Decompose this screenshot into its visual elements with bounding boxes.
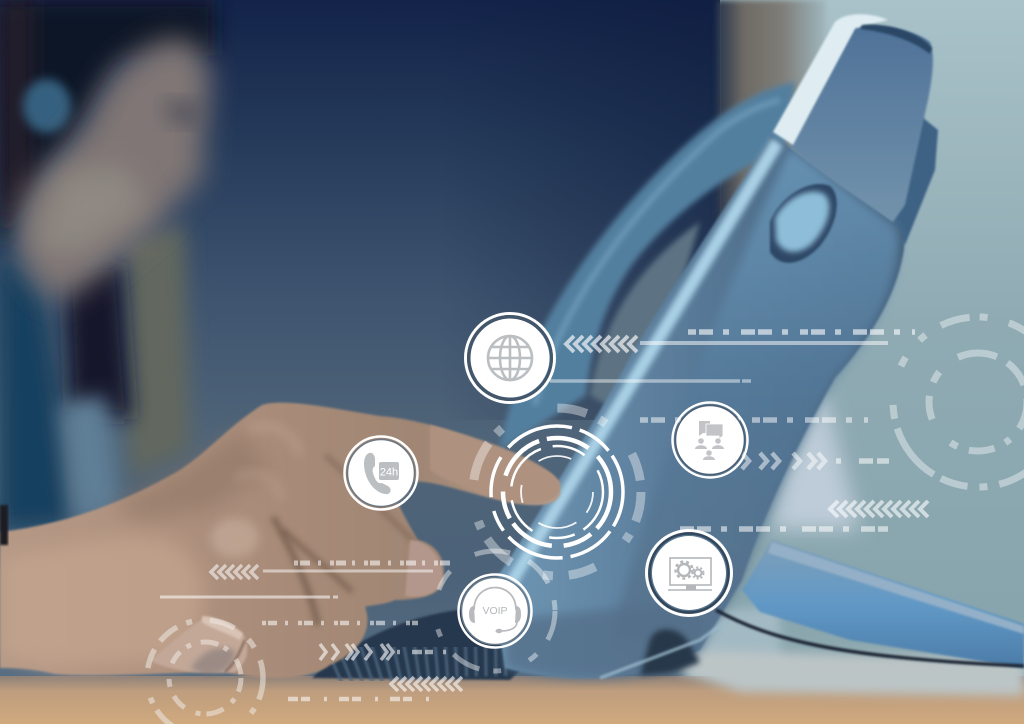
top right dashed line bbox=[688, 329, 915, 335]
bottom arrows right bbox=[320, 644, 393, 660]
middle dashed line bbox=[262, 621, 418, 625]
thumb bbox=[150, 618, 247, 673]
face bbox=[18, 38, 210, 300]
fingernail bbox=[405, 540, 442, 597]
phone handset top bbox=[790, 27, 933, 222]
left dashed line bbox=[294, 560, 450, 566]
hair bbox=[0, 0, 215, 260]
globe upper line bbox=[640, 341, 888, 345]
phone cable bbox=[716, 610, 1024, 666]
phone lower clip bbox=[640, 629, 700, 675]
left arrows bbox=[211, 565, 258, 579]
icon: VOIP headset: VOIP bbox=[482, 605, 508, 617]
chat trailing dashes bbox=[836, 458, 910, 464]
phone bbox=[492, 14, 1024, 679]
dashed target: right bbox=[893, 317, 1024, 487]
right chevrons bbox=[830, 501, 928, 517]
bottom short dashes bbox=[397, 650, 450, 654]
globe lower line bbox=[550, 379, 751, 383]
knuckles and finger shadows bbox=[325, 455, 418, 545]
overlay lines and dashes bbox=[160, 332, 928, 699]
upper hand shade bbox=[110, 430, 270, 520]
chat dashed line bbox=[640, 417, 868, 423]
bottom dashed line bbox=[288, 697, 434, 701]
lower body shade bbox=[505, 600, 700, 679]
phone button bbox=[770, 184, 837, 263]
shoulder light bbox=[60, 395, 120, 522]
icon: monitor with gears bbox=[646, 530, 732, 616]
pointing fingertip bbox=[430, 425, 560, 504]
hand shape bbox=[0, 403, 560, 678]
icon: chat and people bbox=[672, 402, 748, 478]
icon: 24h phone bbox=[344, 436, 418, 510]
globe arrows left bbox=[566, 336, 637, 352]
phone cradle arm bbox=[500, 82, 795, 450]
left lower line bbox=[160, 596, 338, 598]
icon: globe bbox=[466, 314, 554, 402]
dashed target: bottom left bbox=[147, 620, 263, 724]
watch strap bbox=[0, 505, 8, 545]
lower hand highlight bbox=[0, 537, 203, 668]
blurred woman with headset bbox=[0, 0, 215, 530]
hand bbox=[0, 403, 560, 678]
VOIP dashed ring bbox=[435, 551, 555, 671]
neck bbox=[125, 225, 190, 480]
phone back fin bbox=[888, 117, 938, 245]
central target rings bbox=[473, 408, 641, 576]
headset bbox=[23, 79, 71, 133]
phone front highlight bbox=[500, 138, 783, 596]
wall brightness behind stand bbox=[770, 385, 860, 530]
phone base bbox=[742, 540, 1024, 668]
phone main body bbox=[492, 135, 904, 678]
left upper line bbox=[263, 570, 433, 572]
shirt bbox=[0, 250, 70, 530]
icon: 24h phone: 24h bbox=[380, 466, 398, 478]
icon: VOIP headset bbox=[458, 574, 532, 648]
monitor dashed line bbox=[680, 526, 888, 532]
bottom chevrons bbox=[391, 677, 462, 691]
table bbox=[0, 650, 1024, 724]
chat arrows right bbox=[742, 453, 825, 469]
cradle opening bbox=[590, 222, 700, 410]
dark hair behind bbox=[65, 260, 132, 420]
coiled cord bbox=[312, 608, 530, 680]
